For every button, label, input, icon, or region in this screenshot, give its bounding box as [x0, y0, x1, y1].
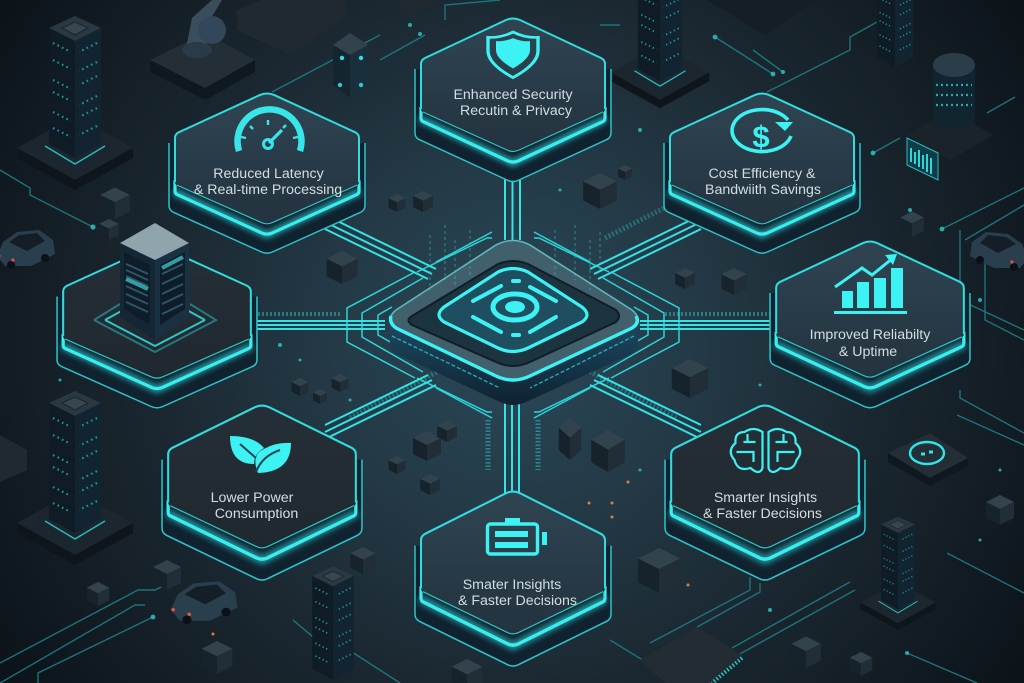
small chip module — [888, 433, 968, 486]
chip inner well — [408, 261, 619, 366]
icon: dollar cycle — [732, 110, 793, 152]
icon: gauge — [238, 109, 302, 151]
label: Smarter Insights — [714, 490, 817, 506]
label: Cost Efficiency & — [709, 166, 816, 182]
label: Lower Power — [211, 490, 294, 506]
traces: quadrant traces around processor — [347, 232, 679, 418]
icon: server rack — [120, 223, 189, 340]
panel: edge server — [57, 246, 257, 408]
icon: shield — [488, 32, 538, 78]
label: Smater Insights — [463, 577, 561, 593]
scattered components — [87, 165, 1014, 683]
panel: smater insights (battery) — [415, 492, 611, 666]
icon: leaves — [230, 436, 291, 473]
base rings — [94, 304, 216, 352]
central processor — [390, 225, 638, 405]
dark blocks — [0, 0, 817, 482]
icon: bar chart — [834, 254, 907, 314]
panel: improved reliability: & Uptime — [839, 344, 897, 360]
chip: bottom right — [640, 627, 742, 683]
panel: lower power — [162, 406, 362, 580]
chip top outer — [390, 240, 638, 380]
panel: reduced latency: & Real-time Processing — [194, 182, 342, 198]
panel: cost efficiency — [664, 93, 860, 253]
panel: lower power: Consumption — [215, 506, 298, 522]
panel: smater insights (battery): & Faster Decisions — [458, 593, 577, 609]
label: Improved Reliabilty — [810, 327, 931, 343]
traces: data buses — [255, 170, 772, 495]
panel: cost efficiency: Bandwiith Savings — [705, 182, 821, 198]
icon: cars — [0, 230, 1024, 624]
label: Reduced Latency — [213, 166, 325, 182]
panel: enhanced security: Recutin & Privacy — [460, 103, 573, 119]
panel: enhanced security — [415, 18, 611, 182]
robot arm — [150, 0, 255, 100]
icon: small glowing tower — [333, 33, 368, 98]
chip bright edge — [391, 316, 637, 380]
icon: battery — [488, 518, 547, 554]
icon: brain — [731, 429, 800, 472]
label: Enhanced Security — [453, 87, 573, 103]
panel: smarter insights (brain) — [665, 406, 865, 580]
icon glyph: dollar: $ — [752, 119, 770, 154]
icon: cylinder tower — [907, 53, 993, 160]
rising data — [430, 225, 600, 290]
chip glow — [395, 250, 635, 390]
panel: reduced latency — [169, 93, 365, 253]
chip core marks — [473, 281, 556, 335]
chip ring — [493, 294, 537, 320]
panel: smarter insights (brain): & Faster Decisions — [703, 506, 822, 522]
monitor — [907, 138, 938, 180]
panel: improved reliability — [770, 242, 970, 408]
chip side wall — [390, 320, 638, 405]
chip core plate — [439, 268, 587, 352]
orange sparks — [212, 480, 690, 636]
